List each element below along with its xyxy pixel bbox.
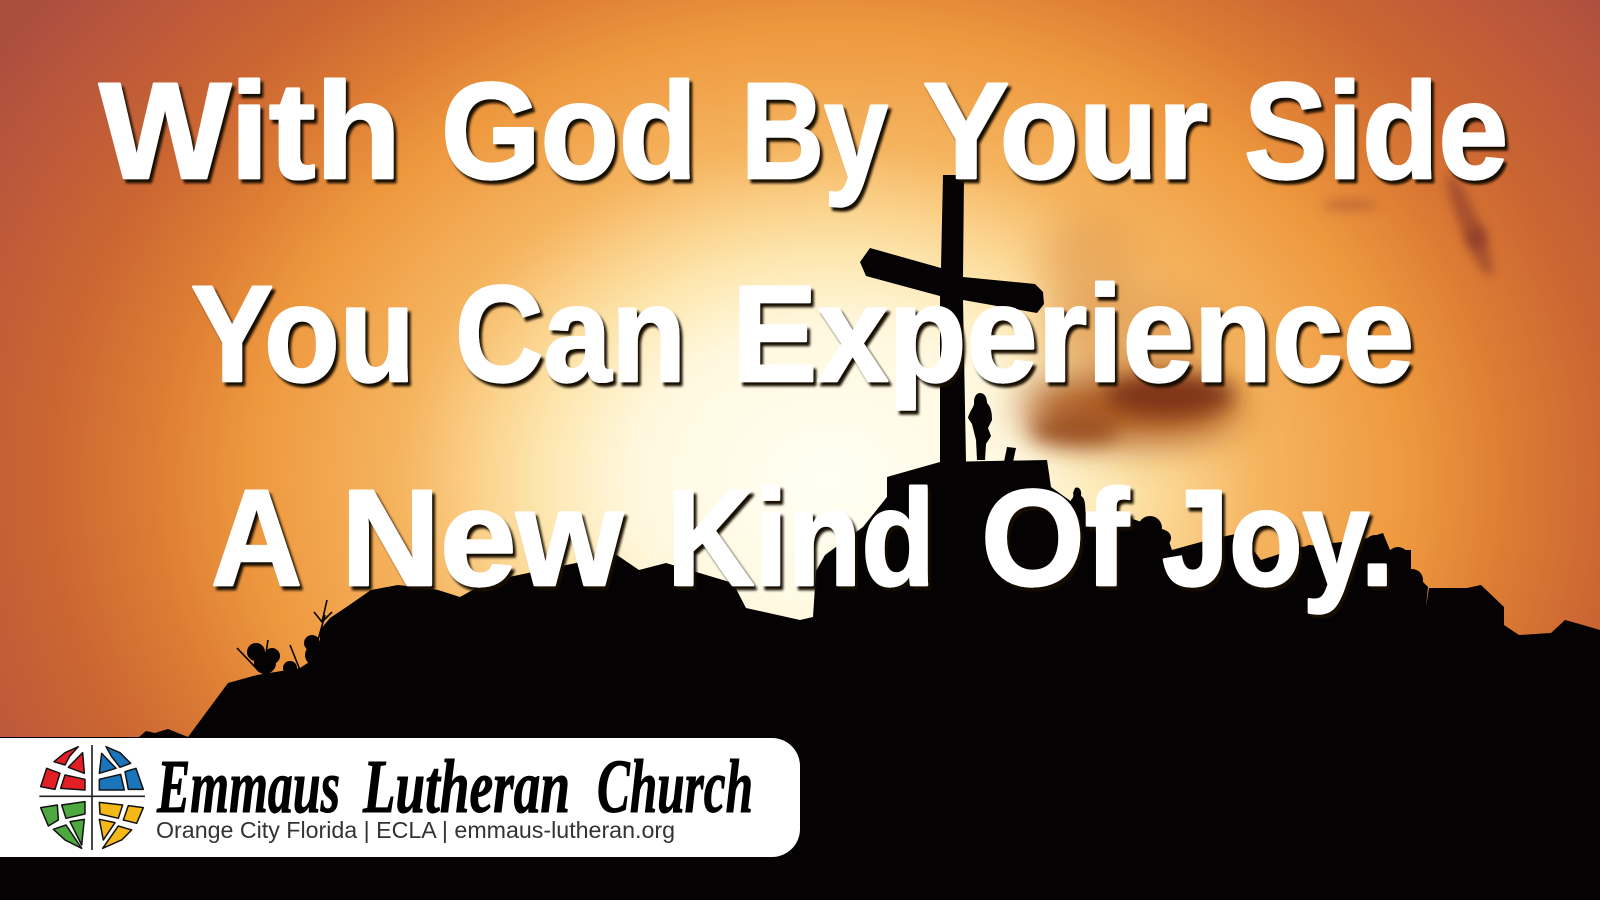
storm cloud <box>1020 170 1500 445</box>
blue quadrant <box>99 747 143 790</box>
headline line 3: Kind <box>667 462 935 615</box>
left shrubs <box>139 600 332 737</box>
headline line 1: Your <box>923 55 1208 208</box>
headline line 2 <box>191 258 1414 411</box>
red quadrant <box>41 747 85 790</box>
standing figure <box>968 393 992 460</box>
green quadrant <box>41 802 85 848</box>
headline line 3 <box>211 462 1394 615</box>
banner panel <box>0 738 800 857</box>
headline line 2: Can <box>455 258 686 411</box>
headline line 3: A <box>211 462 302 615</box>
headline line 1: With <box>99 55 401 208</box>
headline line 2: You <box>191 258 415 411</box>
rock slab <box>1004 447 1016 462</box>
headline line 1 <box>99 55 1508 208</box>
logo cross <box>39 745 145 850</box>
small figure <box>1068 487 1085 522</box>
headline line 1: By <box>741 55 888 208</box>
church banner <box>0 738 800 857</box>
headline line 3: New <box>341 462 623 615</box>
yellow quadrant <box>99 802 143 848</box>
headline line 1: Side <box>1244 55 1508 208</box>
right bushes <box>1138 516 1423 591</box>
headline line 1: God <box>441 55 697 208</box>
church name <box>156 745 753 829</box>
cross <box>860 175 1044 462</box>
church details line: Orange City Florida | ECLA | emmaus-lutheran.org <box>156 817 675 843</box>
headline <box>99 55 1508 615</box>
church name: Emmaus <box>156 745 340 829</box>
church name: Church <box>597 745 753 829</box>
headline line 3: Of <box>981 462 1129 615</box>
church name: Lutheran <box>362 745 570 829</box>
headline line 3: Joy. <box>1162 462 1394 615</box>
hill <box>0 460 1600 900</box>
icon: ELCA cross globe logo <box>39 745 145 850</box>
headline line 2: Experience <box>732 258 1414 411</box>
